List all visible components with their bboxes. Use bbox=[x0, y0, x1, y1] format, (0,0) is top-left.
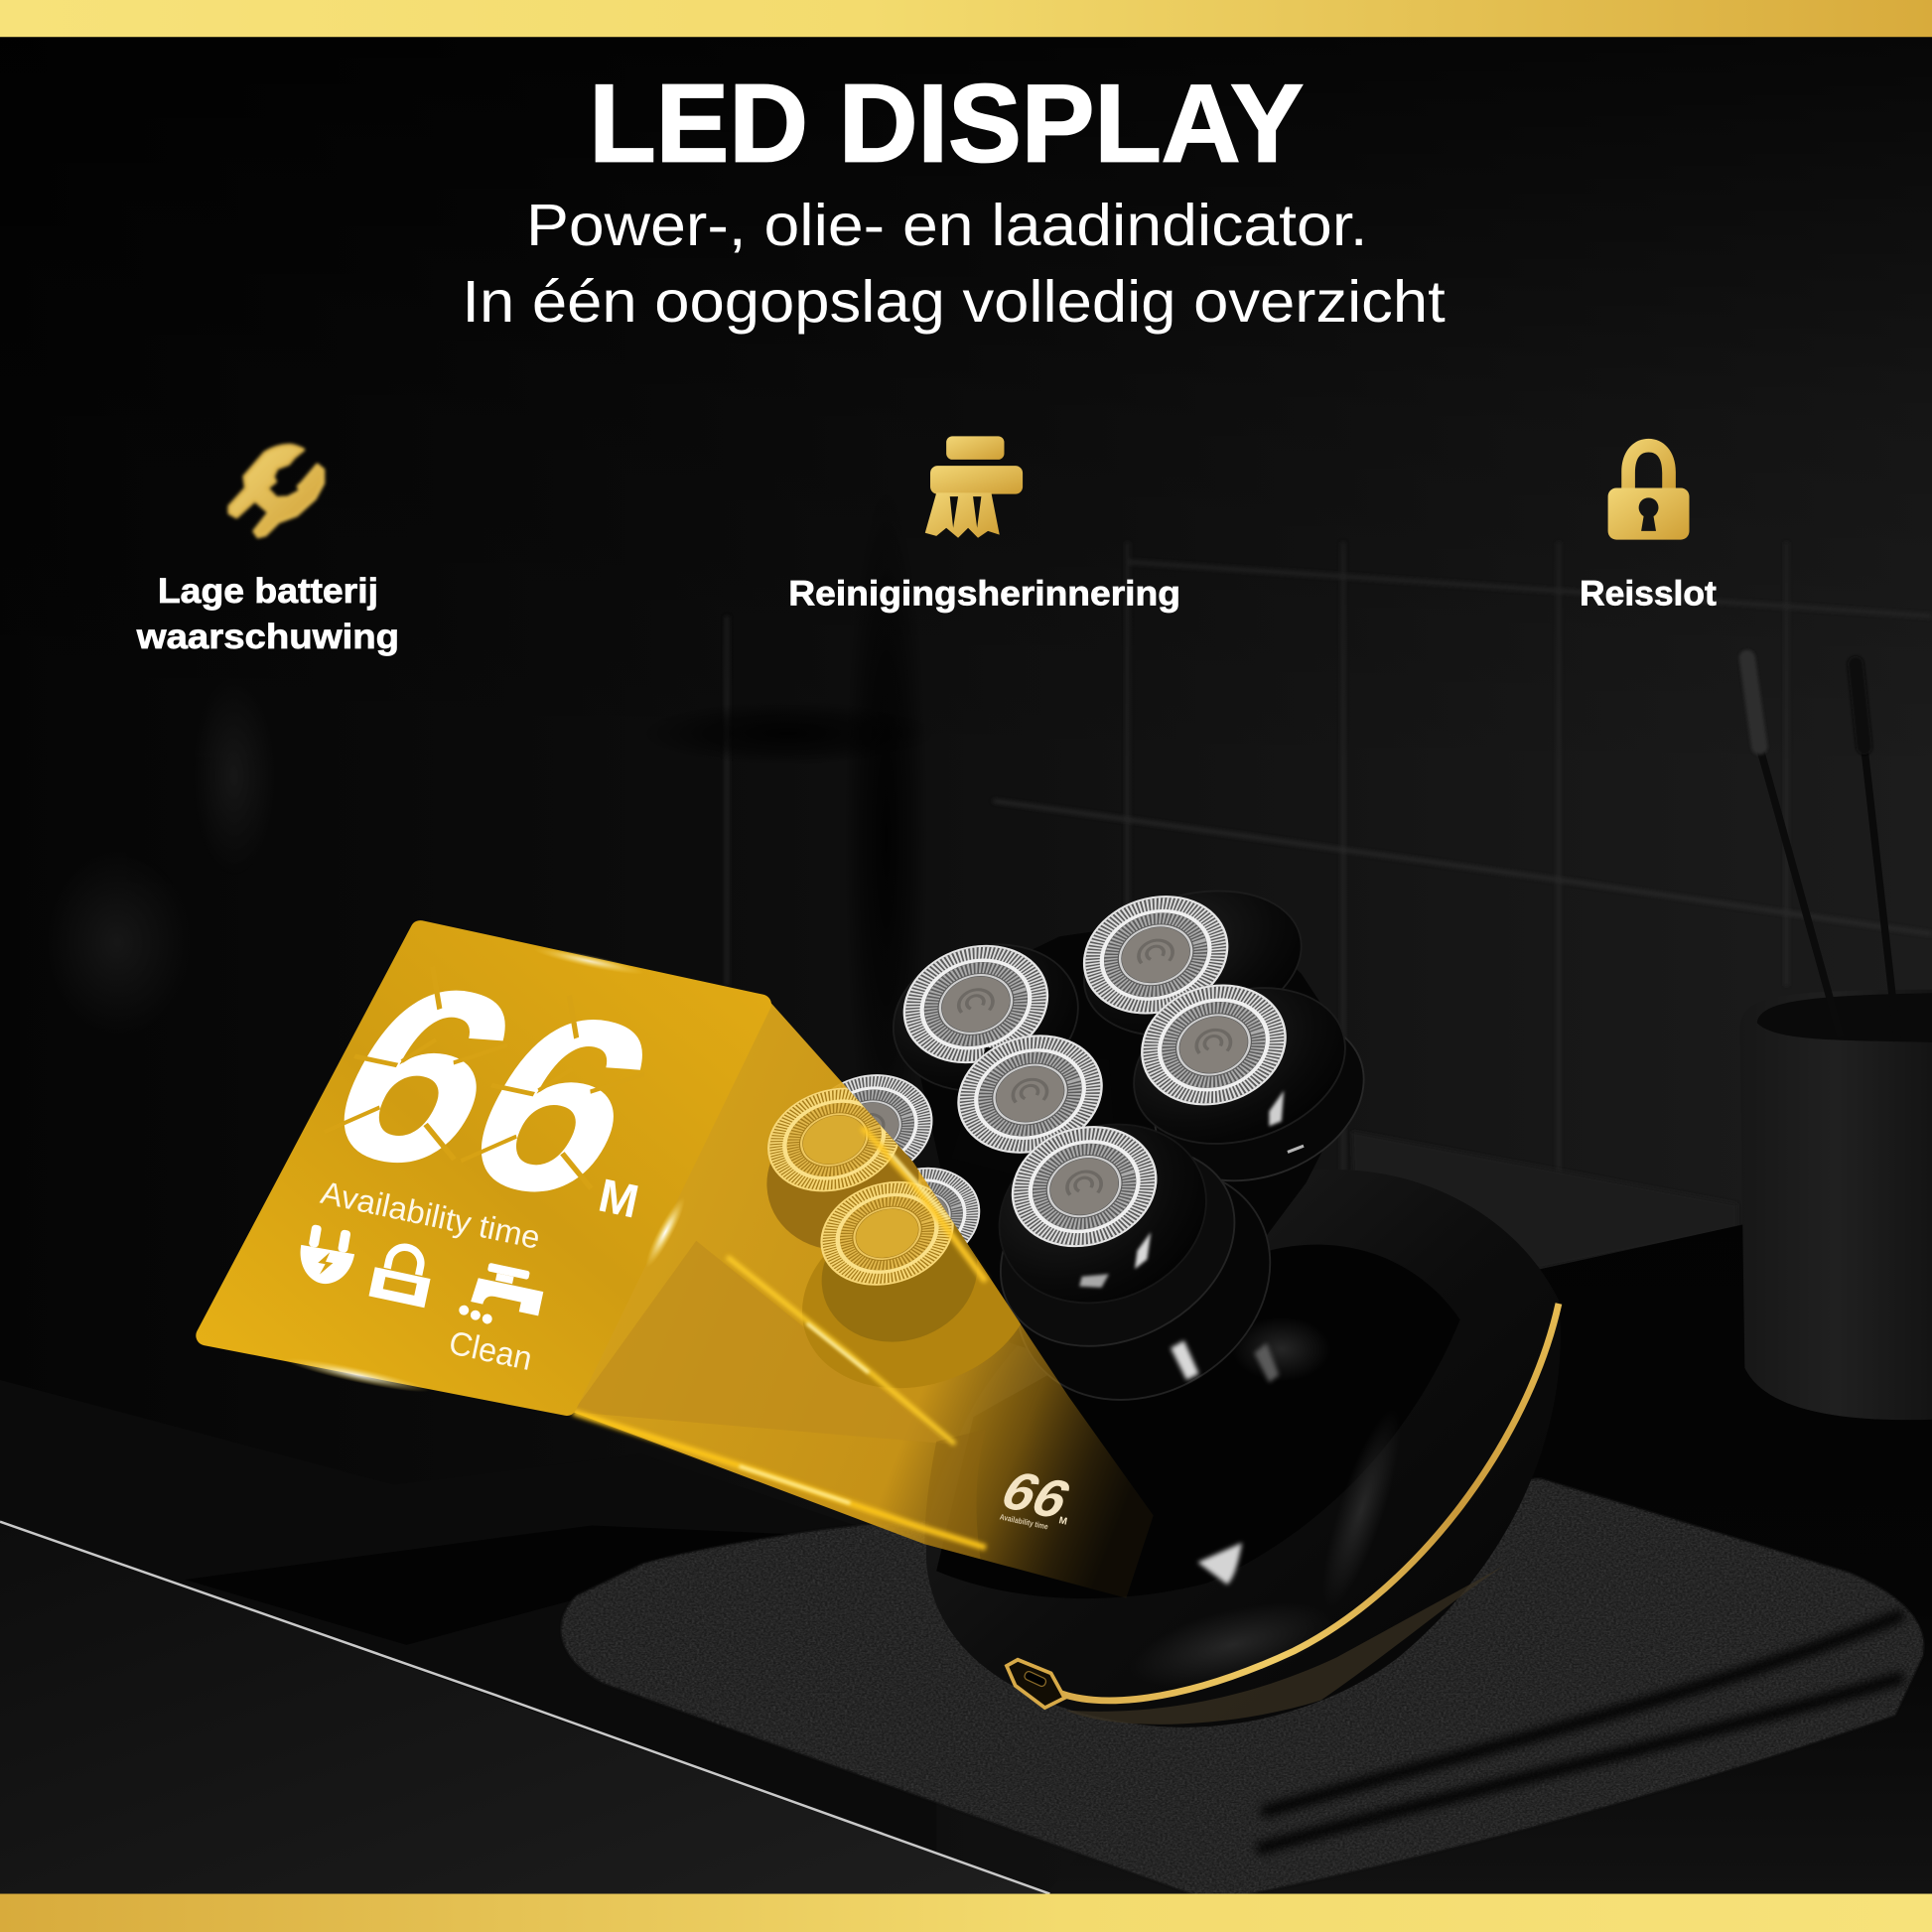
counter foreground surface bbox=[0, 1522, 1047, 1894]
head: back left bbox=[877, 924, 1095, 1111]
folded towel bbox=[561, 1478, 1923, 1894]
cup with brushes bbox=[1739, 658, 1932, 1420]
label: low battery: waarschuwing bbox=[136, 619, 399, 656]
panel face bbox=[206, 930, 761, 1406]
brush one bbox=[1747, 658, 1841, 1037]
bottom gold band bbox=[0, 1894, 1932, 1932]
towel fold shadows bbox=[1257, 1614, 1903, 1850]
head: centre bbox=[942, 1018, 1118, 1182]
label: low battery: Lage batterij bbox=[158, 573, 378, 611]
blurred faucet silhouette bbox=[640, 481, 936, 1195]
soft gloss reflections bbox=[1122, 1317, 1415, 1704]
beam light streaks bbox=[573, 1128, 986, 1548]
head: back right bbox=[1067, 868, 1317, 1059]
panel icon: plug bbox=[295, 1223, 358, 1289]
top gold band bbox=[0, 0, 1932, 37]
glowing edge flares bbox=[532, 943, 645, 979]
icon: low battery plug bbox=[229, 446, 323, 536]
LED display panel bbox=[206, 927, 761, 1406]
display on shaver body: M bbox=[1057, 1515, 1068, 1528]
counter front-left plane bbox=[0, 1380, 936, 1894]
unit letter M: M bbox=[595, 1169, 643, 1228]
head: left silver pair bbox=[791, 1059, 993, 1282]
tile grid on the wall bbox=[727, 542, 1932, 1244]
LED digits: 66 bbox=[283, 928, 700, 1252]
head: right bbox=[1114, 962, 1388, 1210]
shaver body bbox=[926, 1170, 1561, 1727]
icon: travel lock bbox=[1608, 439, 1690, 540]
display on shaver body: 66 bbox=[991, 1461, 1081, 1530]
counter ledge and back plane bbox=[1351, 1131, 1737, 1269]
availability caption: Availability time bbox=[318, 1174, 543, 1256]
label: travel lock: Reisslot bbox=[1580, 575, 1717, 613]
gold-tinted heads inside the beam bbox=[766, 1088, 1021, 1559]
subtitle line two: In één oogopslag volledig overzicht bbox=[462, 268, 1446, 335]
label: cleaning reminder: Reinigingsherinnering bbox=[788, 575, 1180, 613]
gold band bbox=[1053, 1304, 1559, 1701]
cup opening bbox=[1757, 993, 1932, 1042]
head hub bbox=[905, 911, 1364, 1386]
hologram beam from display bbox=[573, 1001, 1154, 1598]
shaver lid face bbox=[936, 1245, 1460, 1598]
label: low battery bbox=[136, 573, 399, 656]
beam lower facet bbox=[573, 1241, 950, 1445]
counter edge highlight bbox=[0, 1522, 1049, 1894]
panel icon: lock bbox=[369, 1242, 436, 1308]
reflection beneath the gold band bbox=[1066, 1565, 1506, 1725]
display on shaver body: Availability time bbox=[999, 1512, 1049, 1532]
icon: cleaning brush bbox=[925, 436, 1023, 538]
segment gaps bbox=[315, 961, 681, 1188]
blurred bottle and jar bbox=[43, 678, 276, 1035]
usb port bbox=[1007, 1660, 1064, 1708]
title: LED DISPLAY bbox=[589, 62, 1304, 186]
subtitle line one: Power-, olie- en laadindicator. bbox=[526, 192, 1368, 258]
panel icon: faucet bbox=[458, 1259, 547, 1334]
cup body bbox=[1739, 990, 1932, 1420]
head: front bbox=[966, 1094, 1313, 1447]
clean caption: Clean bbox=[446, 1324, 535, 1378]
shaver bbox=[791, 868, 1561, 1727]
brush two bbox=[1856, 664, 1897, 1041]
